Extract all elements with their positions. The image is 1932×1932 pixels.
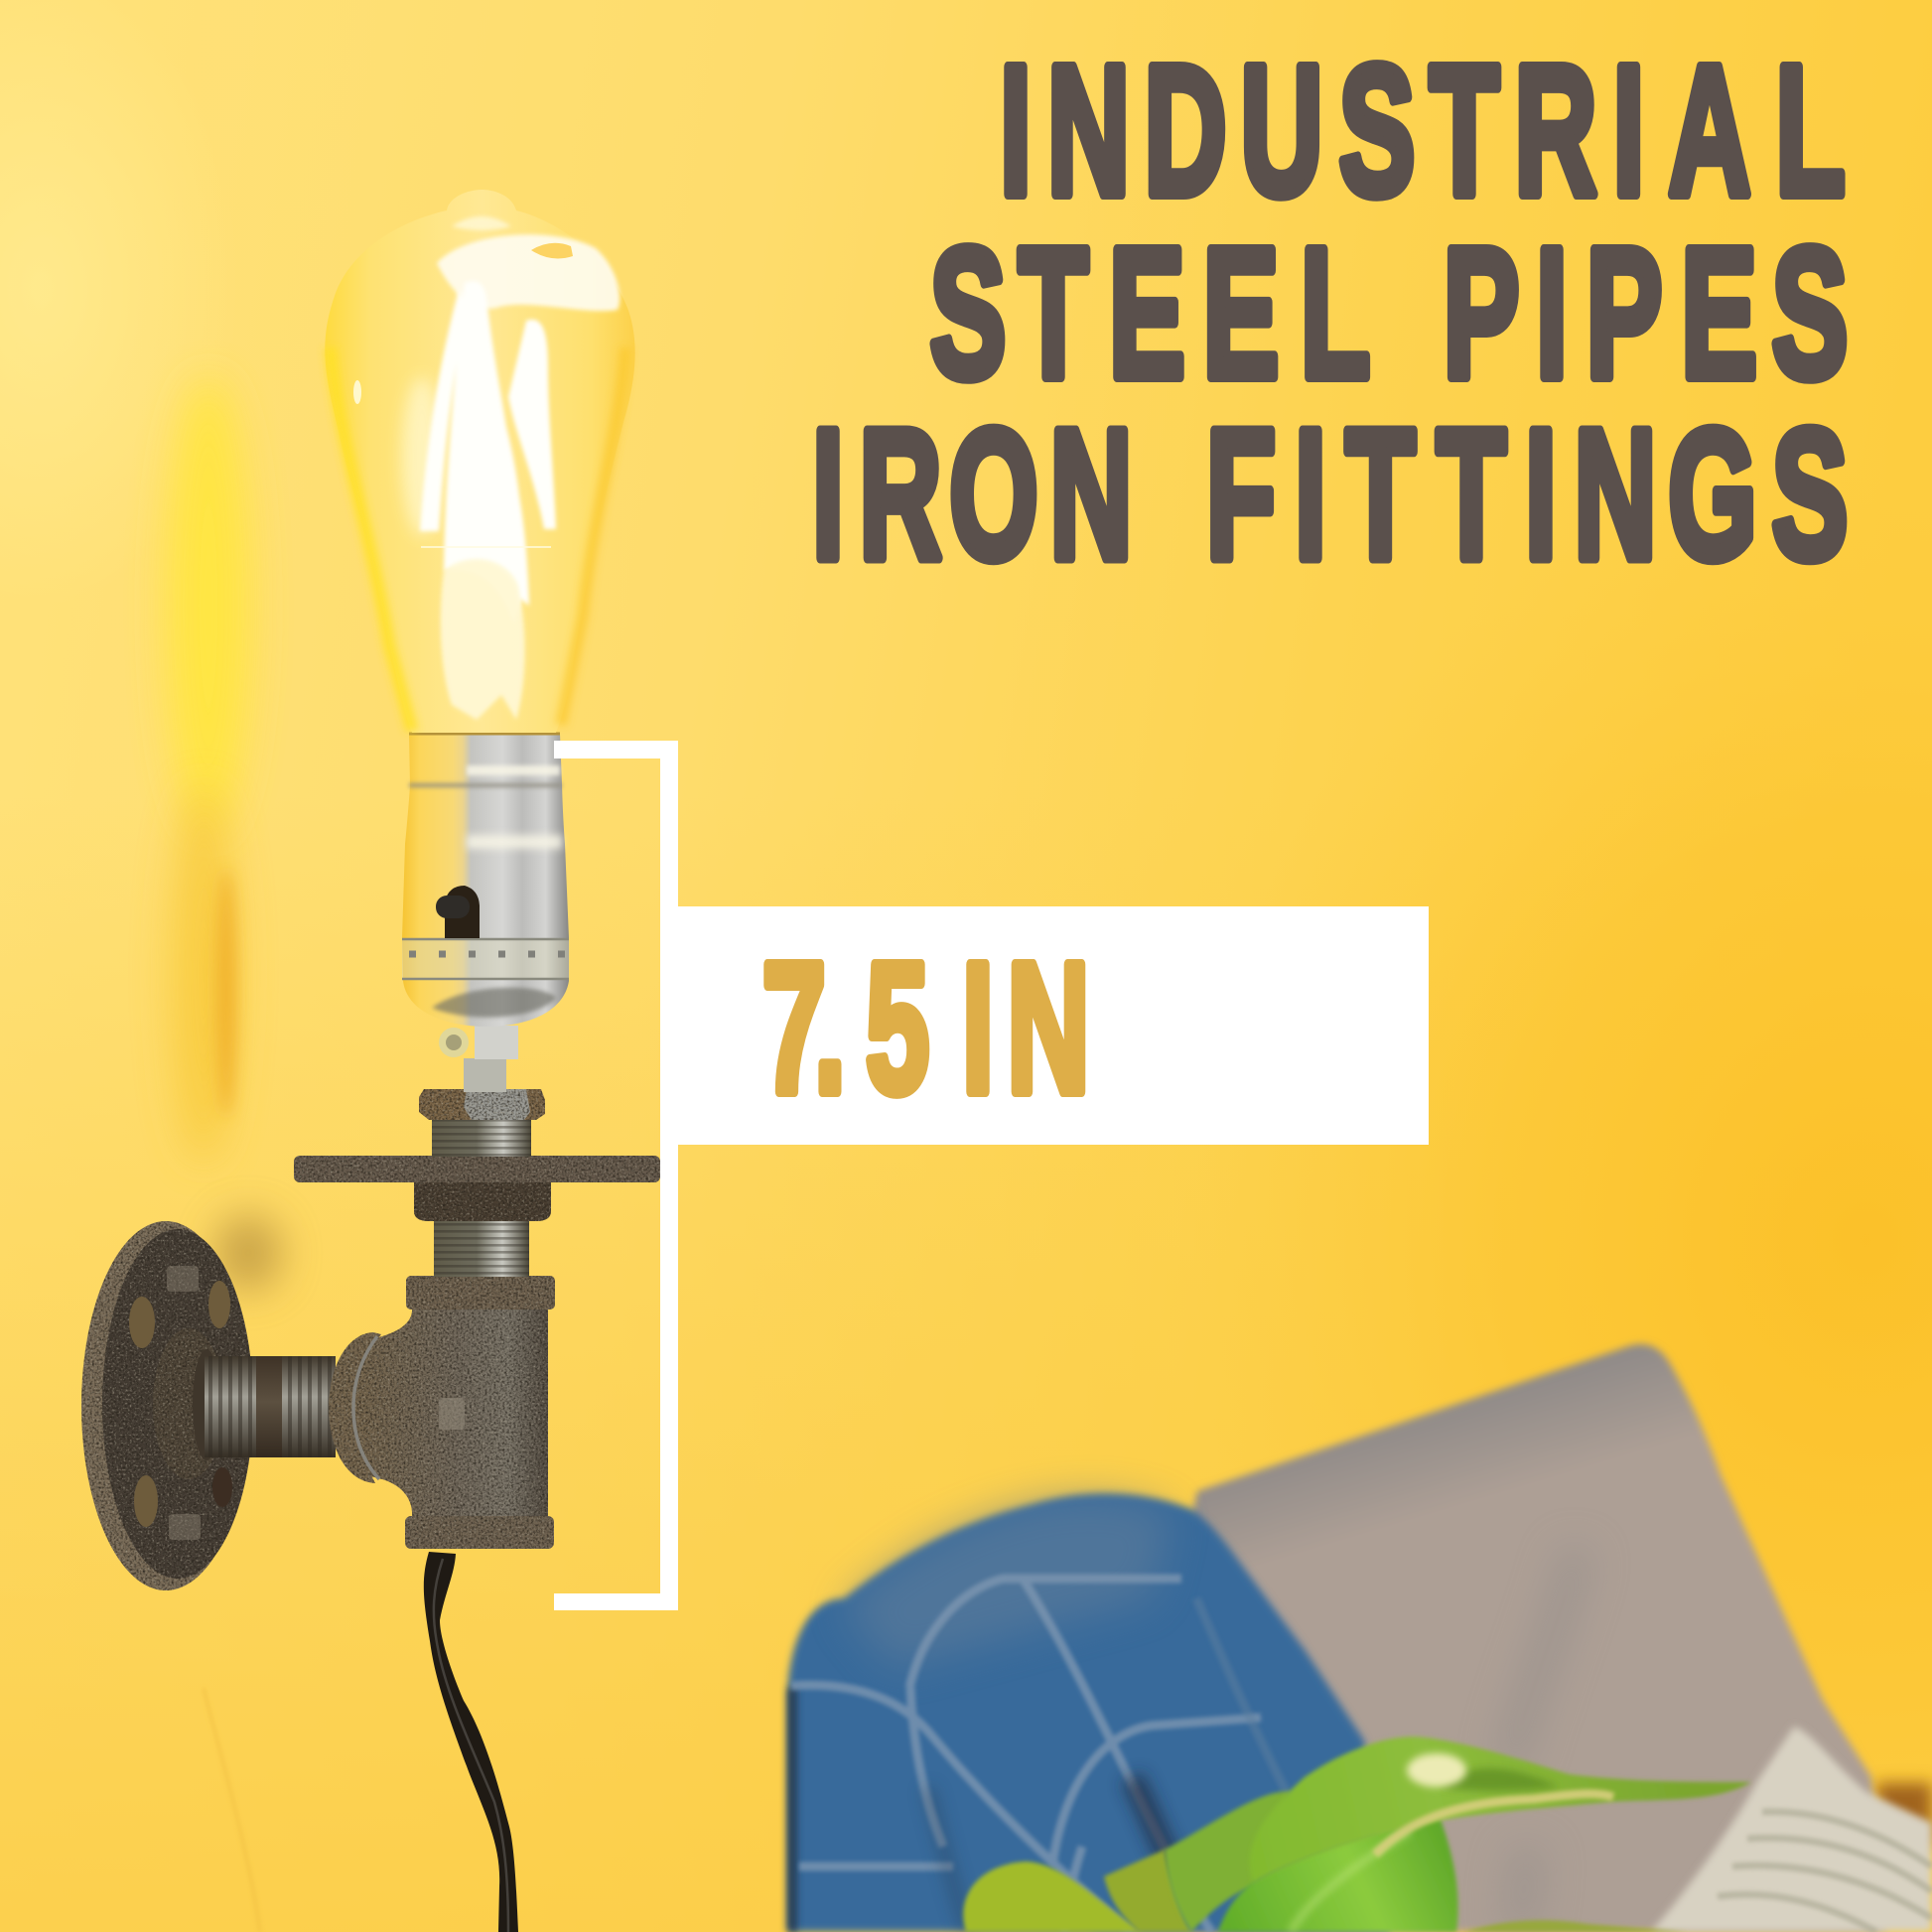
tee body with side arm: [347, 1309, 548, 1516]
socket switch slot and knob: [445, 886, 480, 938]
silver rod and screw: [439, 1026, 518, 1092]
edison light bulb: [325, 190, 635, 733]
measurement bracket: [554, 741, 678, 1610]
lower hub of shelf flange: [414, 1182, 551, 1221]
title line 1: INDUSTRIAL: [1000, 27, 1846, 233]
flange hub: [153, 1328, 224, 1479]
leaf: small yellow-green: [963, 1862, 1142, 1932]
sofa cushion: [1092, 1344, 1886, 1932]
power cord: [424, 1552, 518, 1932]
short thread above flange: [432, 1119, 531, 1157]
flange screw holes: [129, 1281, 232, 1527]
hex nut: [419, 1089, 545, 1120]
socket ring: [402, 939, 569, 979]
tee embossed mark: [439, 1398, 465, 1430]
upper threaded pipe: [434, 1221, 529, 1277]
bulb filament glow: [402, 377, 442, 536]
leaf: back green: [1165, 1792, 1291, 1932]
silver lamp socket: [402, 734, 569, 1027]
leaf: bottom right green: [1463, 1920, 1688, 1932]
leaf: pale variegation spot: [1407, 1753, 1466, 1787]
bulb upper reflection: [437, 234, 620, 311]
blue plaid throw blanket: [788, 1493, 1390, 1932]
horizontal iron shelf flange: [294, 1156, 660, 1182]
title line 3: IRON FITTINGS: [812, 391, 1848, 598]
wall flange: [81, 1221, 253, 1590]
iron tee fitting: [329, 1276, 555, 1549]
title: [812, 27, 1848, 598]
measurement value: 7.5 IN: [762, 924, 1090, 1131]
pothos plant leaves: [963, 1736, 1751, 1932]
tee bottom collar: [405, 1516, 554, 1549]
leaf: main variegated with long tip: [1250, 1736, 1751, 1883]
bulb glass highlight: [353, 380, 361, 404]
wooden sofa frame: [1876, 1783, 1932, 1847]
tee side collar: [329, 1332, 381, 1483]
measurement label panel: [678, 906, 1429, 1145]
leaf: back stem leaf: [1104, 1850, 1191, 1932]
threaded nipple pipe: [193, 1349, 336, 1460]
leaf: front bright green: [1218, 1817, 1458, 1932]
striped pillow: [1651, 1726, 1932, 1932]
tee top collar: [406, 1276, 555, 1310]
flange embossed marks: [167, 1266, 201, 1540]
title line 2: STEEL PIPES: [930, 209, 1848, 416]
